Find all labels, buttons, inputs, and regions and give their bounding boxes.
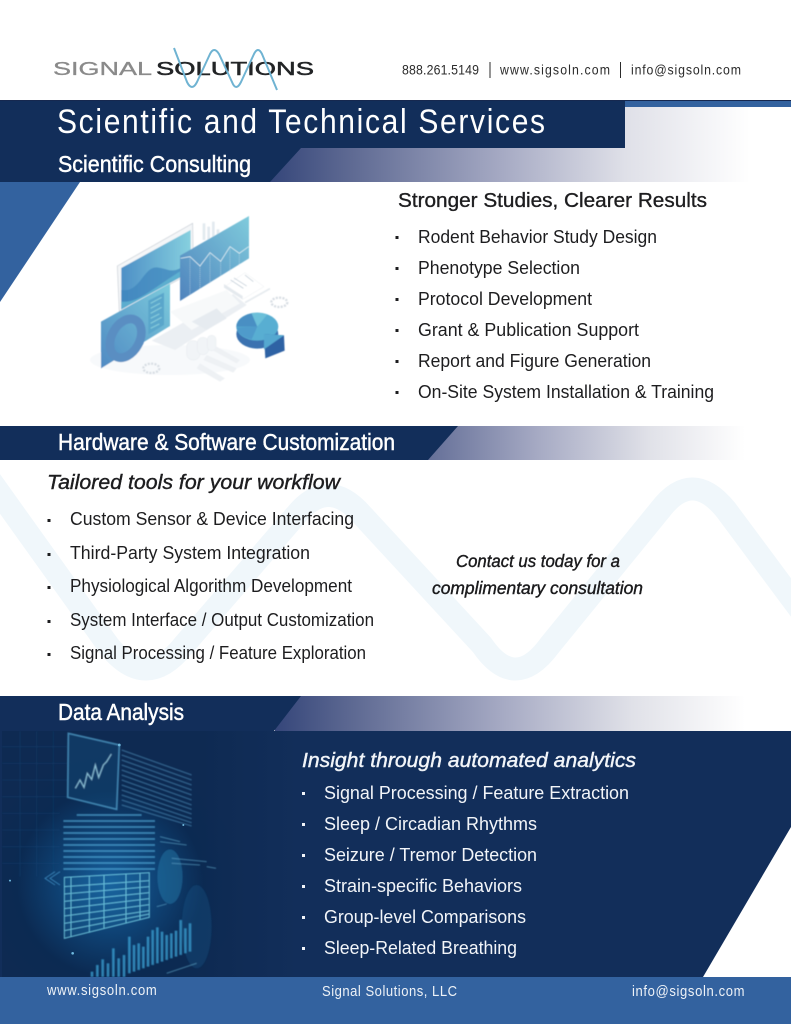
heading: scientific consulting: Scientific Consulting <box>58 151 251 177</box>
main title: Scientific and Technical Services <box>57 102 545 140</box>
monitor <box>117 223 193 312</box>
logo signal wave <box>174 48 277 90</box>
list: analytics services: Sleep-Related Breathing <box>324 938 517 958</box>
navy bar <box>0 696 301 731</box>
navy bar <box>0 426 458 460</box>
pie chart <box>236 313 285 358</box>
text lines middle <box>63 815 155 869</box>
logo wordmark: Solutions: SOLUTIONS <box>156 58 314 79</box>
list: consulting services <box>396 227 714 402</box>
subheading: tailored tools: Tailored tools for your workflow <box>47 471 341 494</box>
list: consulting services: Phenotype Selection <box>418 258 580 278</box>
logo <box>53 48 314 90</box>
line chart screen <box>68 733 119 809</box>
gears <box>143 298 287 373</box>
navy subsection bar <box>0 148 301 182</box>
phone: 888.261.5149 <box>402 62 479 78</box>
website: www.sigsoln.com <box>499 62 610 78</box>
list: customization services <box>48 508 374 663</box>
list: consulting services: Protocol Development <box>418 289 592 309</box>
image: holographic data dashboard <box>2 731 300 977</box>
footer bar <box>0 977 791 1024</box>
list: analytics services <box>302 783 629 958</box>
list: customization services: Signal Processing / Feature Exploration <box>70 642 366 663</box>
list: analytics services: Sleep / Circadian Rhythms <box>324 814 537 834</box>
list: analytics services: Strain-specific Behaviors <box>324 876 522 896</box>
heading: stronger studies: Stronger Studies, Clearer Results <box>398 189 707 212</box>
heading: hardware and software: Hardware & Software Customization <box>58 429 395 455</box>
heading: data analysis: Data Analysis <box>58 699 184 725</box>
gradient fade <box>424 426 745 460</box>
list: consulting services: On-Site System Installation & Training <box>418 382 714 402</box>
floor shadow <box>90 345 250 375</box>
footer email: info@sigsoln.com <box>632 983 745 999</box>
list: consulting services: Report and Figure Generation <box>418 351 651 371</box>
pie top <box>236 313 278 341</box>
illustration: isometric analytics dashboard <box>90 216 287 382</box>
list: consulting services: Rodent Behavior Study Design <box>418 227 657 247</box>
table <box>64 873 149 938</box>
small bars behind monitor <box>203 222 219 240</box>
callout: contact us: complimentary consultation <box>432 578 643 598</box>
navy title panel <box>0 100 625 148</box>
section bar: data analysis <box>0 696 745 731</box>
footer website: www.sigsoln.com <box>46 982 157 998</box>
list: analytics services: Group-level Comparisons <box>324 907 526 927</box>
panel: data analysis services <box>302 750 636 958</box>
blue corner triangle <box>0 182 80 302</box>
panel: customization list <box>47 471 374 663</box>
footer company: Signal Solutions, LLC <box>322 983 457 999</box>
list: consulting services: Grant & Publication Support <box>418 320 639 340</box>
list: customization services: Physiological Algorithm Development <box>70 575 352 596</box>
contact bar <box>402 62 741 78</box>
section bar: hardware and software customization <box>0 426 745 460</box>
panel: data analysis navy background <box>0 731 791 977</box>
header band <box>0 100 791 182</box>
email: info@sigsoln.com <box>631 62 741 78</box>
pie ellipse <box>157 849 183 904</box>
laptop base <box>152 294 247 350</box>
table lines upper <box>122 750 192 826</box>
top gradient fade <box>270 107 791 182</box>
callout: contact us: Contact us today for a <box>456 551 620 571</box>
list: analytics services: Signal Processing / Feature Extraction <box>324 783 629 803</box>
logo wordmark: Signal: SIGNAL <box>53 58 152 79</box>
list: customization services: Custom Sensor & Device Interfacing <box>70 508 354 529</box>
detached slice <box>264 334 285 358</box>
gradient fade <box>275 696 745 731</box>
document stack <box>224 273 264 299</box>
subheading: insight: Insight through automated analytics <box>302 750 636 772</box>
background wave watermark <box>0 452 791 669</box>
grid backdrop <box>2 731 67 877</box>
list: customization services: Third-Party System Integration <box>70 542 310 563</box>
database cylinders <box>187 335 216 360</box>
blue accent strip <box>625 100 791 107</box>
bar chart <box>91 920 191 977</box>
panel: scientific consulting services <box>396 189 714 402</box>
list: customization services: System Interface / Output Customization <box>70 609 374 630</box>
chevrons <box>45 872 60 885</box>
image glow background <box>2 731 300 977</box>
left floating donut panel <box>101 283 170 368</box>
footer <box>0 977 791 1024</box>
right floating chart panel <box>180 216 249 301</box>
list: analytics services: Seizure / Tremor Detection <box>324 845 537 865</box>
pie side <box>236 319 278 349</box>
data tags <box>197 347 240 382</box>
callout: contact us <box>432 551 643 598</box>
